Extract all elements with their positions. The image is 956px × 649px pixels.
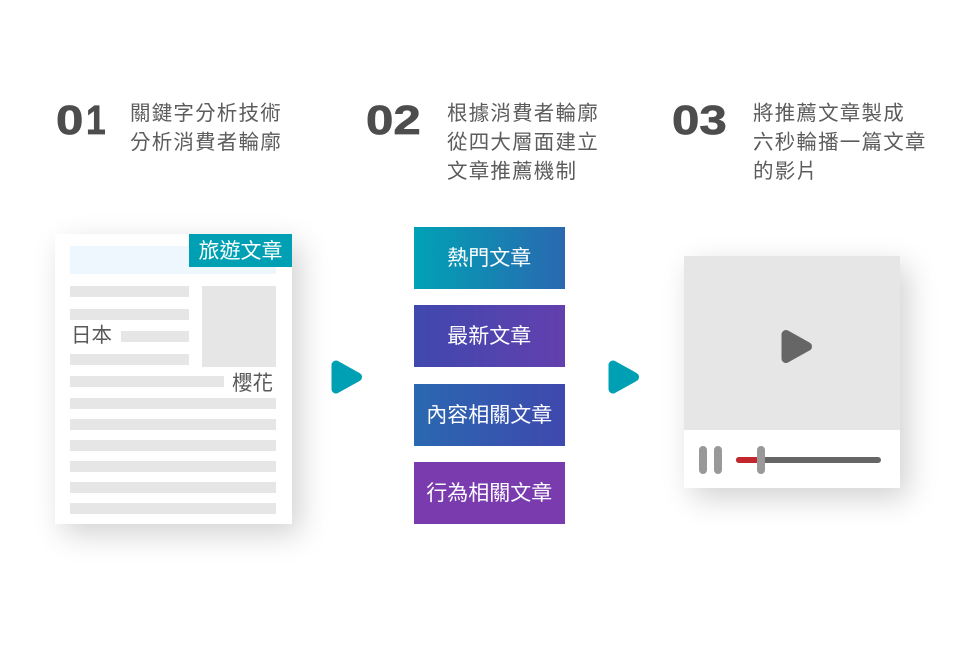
panel: article page (55, 234, 292, 524)
step 2 description: 文章推薦機制 (447, 160, 577, 183)
article text lines (70, 286, 276, 514)
progress bar (736, 446, 881, 474)
step 1 description (130, 102, 282, 154)
step 2 description: 從四大層面建立 (447, 131, 599, 154)
arrow: step 2 to step 3 (608, 360, 639, 394)
step 3 number: 03 (672, 97, 727, 143)
icon: play (782, 330, 812, 363)
step 3 description (753, 102, 927, 183)
icon: pause (699, 446, 722, 474)
tag: travel article: 旅遊文章 (198, 240, 282, 263)
step 2 description (447, 102, 599, 183)
button: latest articles: 最新文章 (447, 325, 531, 348)
step 3 description: 將推薦文章製成 (753, 102, 905, 125)
step 1 number (56, 97, 105, 143)
video screen (684, 256, 900, 430)
step 1 number: 1 (86, 97, 105, 143)
step 1 description: 分析消費者輪廓 (130, 131, 282, 154)
step 1 description: 關鍵字分析技術 (130, 102, 282, 125)
tag: travel article (189, 234, 292, 267)
step 1 number: 0 (56, 97, 83, 143)
step 2 number: 02 (366, 97, 421, 143)
panel: video player (684, 256, 900, 488)
step 3 description: 的影片 (753, 160, 818, 183)
article header band (70, 246, 276, 274)
button: behavior related articles (414, 462, 564, 524)
button: popular articles (414, 227, 564, 289)
article image placeholder (202, 286, 276, 367)
step 2 description: 根據消費者輪廓 (447, 102, 599, 125)
button: content related articles (414, 384, 564, 446)
button: popular articles: 熱門文章 (447, 247, 531, 270)
button: behavior related articles: 行為相關文章 (426, 482, 552, 505)
step 3 description: 六秒輪播一篇文章 (753, 131, 927, 154)
arrow: step 1 to step 2 (332, 360, 362, 394)
button: latest articles (414, 305, 564, 367)
keyword: cherry blossom: 櫻花 (232, 372, 273, 395)
button: content related articles: 內容相關文章 (426, 404, 552, 426)
keyword: Japan: 日本 (71, 324, 112, 347)
